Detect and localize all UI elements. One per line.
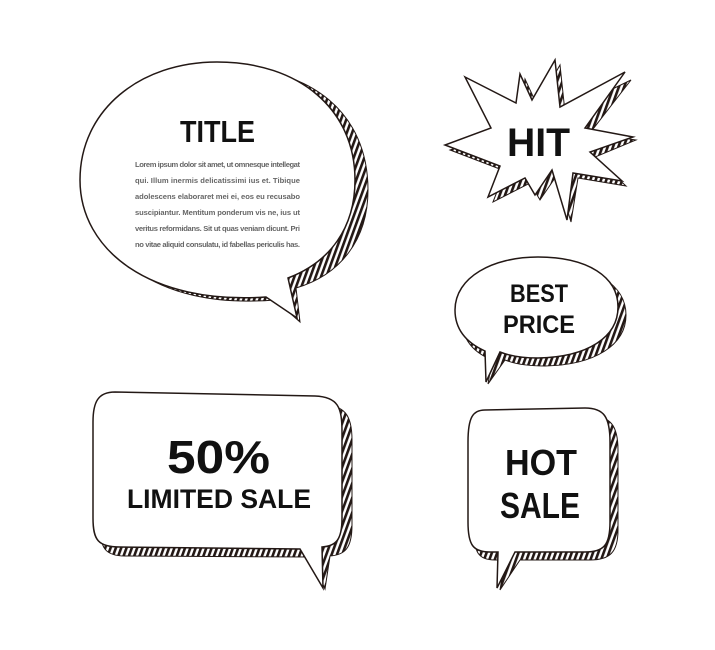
text block: lorem ipsum <box>135 160 300 249</box>
heading: TITLE: TITLE <box>180 114 255 149</box>
bubble: hot sale: SALE <box>500 485 580 526</box>
bubble: best price <box>455 257 626 384</box>
text block: lorem ipsum: no vitae aliquid consulatu, id fabellas periculis has. <box>135 240 300 249</box>
text block: lorem ipsum: adolescens elaboraret mei ei, eos eu recusabo <box>135 192 300 201</box>
bubble: hot sale <box>468 408 618 590</box>
starburst: HIT <box>445 60 636 222</box>
bubble: 50% limited sale: LIMITED SALE <box>127 484 311 514</box>
starburst: HIT: HIT <box>507 121 570 165</box>
text block: lorem ipsum: veritus reformidans. Sit ut quas veniam dicunt. Pri <box>135 224 300 233</box>
text block: lorem ipsum: qui. Illum inermis delicatissimi ius et. Tibique <box>135 176 300 185</box>
text block: lorem ipsum: Lorem ipsum dolor sit amet, ut omnesque intellegat <box>135 160 300 169</box>
bubble: 50% limited sale: 50% <box>167 431 270 483</box>
text block: lorem ipsum: suscipiantur. Mentitum ponderum vis ne, ius ut <box>135 208 300 217</box>
bubble: best price: BEST <box>510 280 568 308</box>
bubble: 50% limited sale <box>93 392 352 589</box>
bubble: hot sale: HOT <box>505 442 577 483</box>
bubble: title <box>80 62 368 322</box>
bubble: best price: PRICE <box>503 311 575 339</box>
